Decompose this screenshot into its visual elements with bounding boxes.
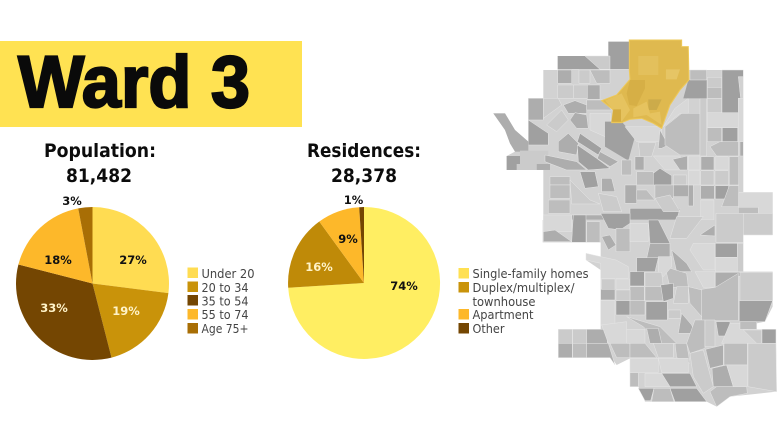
title banner: Ward 3: [18, 42, 250, 123]
pie chart: residence types: [288, 193, 440, 359]
legend: residence types: [458, 267, 588, 336]
pie chart: population by age: 33%: [40, 301, 68, 315]
legend: residence types: Single-family homes: [472, 267, 588, 281]
map: city wards: [493, 40, 777, 407]
map: southern half: [543, 213, 777, 407]
pie chart: residence types: 74%: [390, 279, 418, 293]
heading: residences: 28,378: [331, 165, 397, 187]
legend: age groups: Under 20: [202, 267, 254, 281]
pie chart: population by age: [16, 194, 169, 360]
heading: population: [44, 140, 156, 187]
heading: population: 81,482: [66, 165, 132, 187]
heading: residences: Residences:: [307, 140, 421, 162]
pie chart: residence types: 16%: [305, 260, 333, 274]
heading: residences: [307, 140, 421, 187]
map: northern half: [493, 40, 773, 220]
legend: age groups: 55 to 74: [202, 308, 248, 322]
legend: residence types: townhouse: [472, 295, 536, 309]
legend: age groups: Age 75+: [202, 322, 248, 336]
pie chart: population by age: 19%: [112, 304, 140, 318]
pie chart: population by age: 27%: [119, 253, 147, 267]
legend: residence types: Duplex/multiplex/: [472, 281, 575, 295]
legend: residence types: Other: [472, 322, 505, 336]
legend: residence types: Apartment: [472, 308, 534, 322]
legend: age groups: 20 to 34: [202, 281, 248, 295]
pie chart: residence types: 1%: [344, 193, 364, 207]
legend: age groups: [188, 267, 254, 336]
map: highlighted ward 3: [602, 40, 689, 128]
pie chart: residence types: 9%: [338, 232, 358, 246]
heading: population: Population:: [44, 140, 156, 162]
pie chart: population by age: 18%: [44, 253, 72, 267]
pie chart: population by age: 3%: [62, 194, 82, 208]
legend: age groups: 35 to 54: [202, 294, 248, 308]
